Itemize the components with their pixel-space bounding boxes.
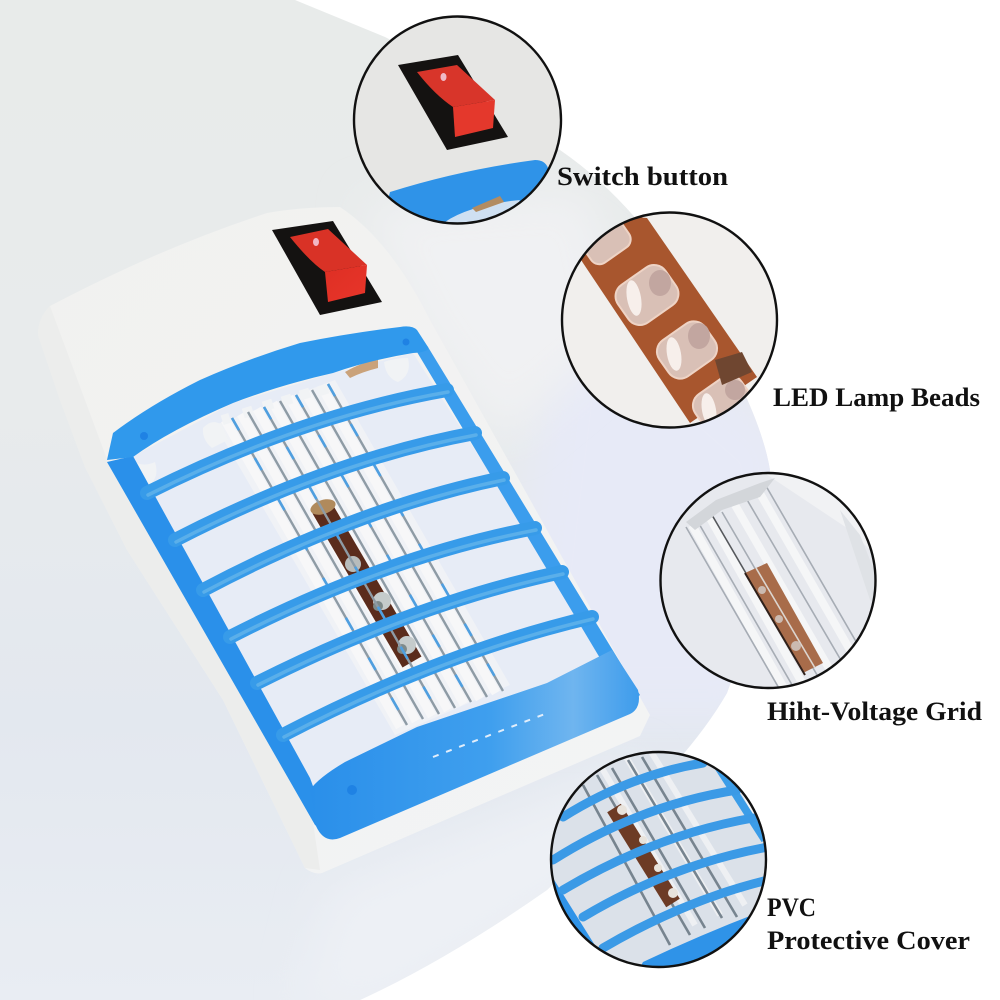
label: high-voltage grid: Hiht-Voltage Grid (767, 697, 983, 726)
grid backing strips (215, 380, 510, 735)
product: mosquito killer lamp (38, 207, 650, 873)
device body (38, 207, 650, 873)
LED strip (308, 496, 416, 662)
callout circle: PVC protective cover (550, 750, 768, 968)
cover top bar (107, 326, 428, 460)
body side face (38, 306, 320, 870)
label: protective cover: Protective Cover (767, 926, 970, 955)
high voltage grid wires (232, 384, 503, 725)
callout circle: LED lamp beads (562, 212, 777, 438)
background (0, 0, 770, 1000)
cover ribs (147, 390, 593, 737)
cover right rail (417, 335, 640, 705)
callout circle: switch button (354, 16, 561, 230)
label: LED lamp beads: LED Lamp Beads (773, 383, 980, 412)
cover bottom block (310, 650, 639, 840)
cage interior (130, 353, 612, 790)
callout circle: high-voltage grid (660, 470, 890, 690)
grid top tabs and hooks (132, 358, 409, 486)
rocker switch (272, 221, 382, 315)
label: PVC: PVC (767, 893, 816, 922)
blue protective cover (107, 326, 640, 839)
label: switch button: Switch button (557, 162, 729, 191)
cover left rail (107, 456, 332, 838)
